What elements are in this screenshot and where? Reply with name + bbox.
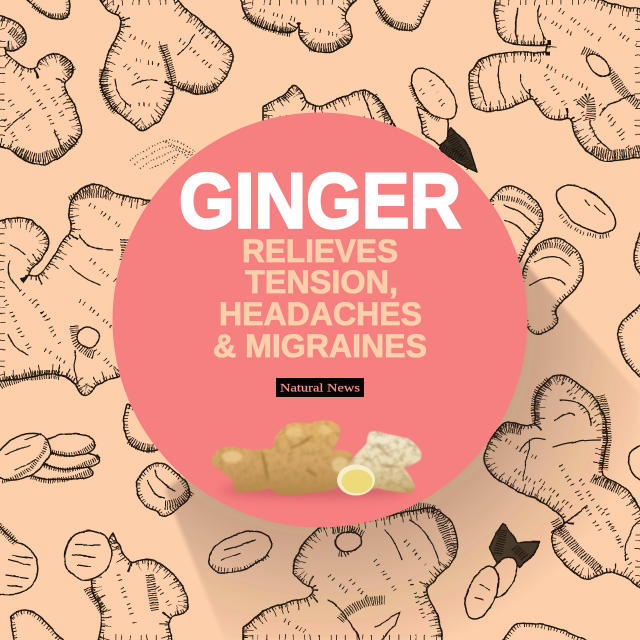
- logo: Natural News: [276, 378, 364, 397]
- sketch: ginger piece top middle: [240, 0, 362, 53]
- sketch: leaf and slices bottom right: [459, 523, 540, 624]
- pale ginger root: [345, 431, 422, 493]
- sketch: ginger slice bottom centre: [203, 523, 277, 581]
- sketch: ginger end bottom left: [0, 520, 38, 595]
- sketch: large ginger right: [484, 375, 640, 592]
- sketch: ginger root top left: [0, 15, 82, 164]
- sketch: large ginger top right: [469, 0, 640, 161]
- photo shadow: [221, 482, 411, 498]
- title: GINGER: [179, 156, 461, 244]
- sketch: ginger piece top middle right: [373, 0, 433, 31]
- sketch: ginger bottom right edge: [500, 623, 597, 640]
- long shadow of circle: [165, 240, 640, 640]
- subtitle: [213, 233, 427, 364]
- sketch: ginger slice right: [548, 176, 624, 242]
- sketch: ginger right edge upper: [634, 223, 640, 278]
- sketch: large ginger bottom centre: [243, 508, 458, 640]
- subtitle: HEADACHES: [219, 296, 422, 332]
- subtitle: TENSION,: [245, 264, 398, 300]
- logo: Natural News: Natural News: [280, 380, 360, 394]
- pink circle: [112, 112, 528, 528]
- cut face of ginger: [337, 464, 375, 496]
- sketch: large ginger left: [0, 185, 200, 395]
- subtitle: RELIEVES: [242, 233, 398, 269]
- sketch: ginger root bottom left: [57, 523, 188, 640]
- sketch: ginger behind the circle top: [263, 85, 395, 127]
- subtitle: & MIGRAINES: [213, 328, 427, 364]
- ginger photo: [211, 420, 422, 498]
- sketch: ginger root top centre: [97, 0, 233, 131]
- sketch: ginger chunk below left of circle: [137, 463, 192, 517]
- sketch: ginger slices and leaf top right: [403, 61, 477, 172]
- sketch: ginger chunk right of circle: [490, 186, 543, 262]
- sketch: ginger right edge: [619, 300, 640, 483]
- golden ginger root: [211, 420, 353, 496]
- sketch: ginger slice top left: [23, 0, 70, 20]
- sketch: ginger tip right of circle: [519, 238, 583, 334]
- sketch: small ginger left of circle: [122, 404, 158, 454]
- sketch: ginger powder pile: [130, 140, 195, 170]
- sketch: ginger slice bottom left: [10, 610, 67, 640]
- sketch: stack of ginger slices: [0, 424, 100, 490]
